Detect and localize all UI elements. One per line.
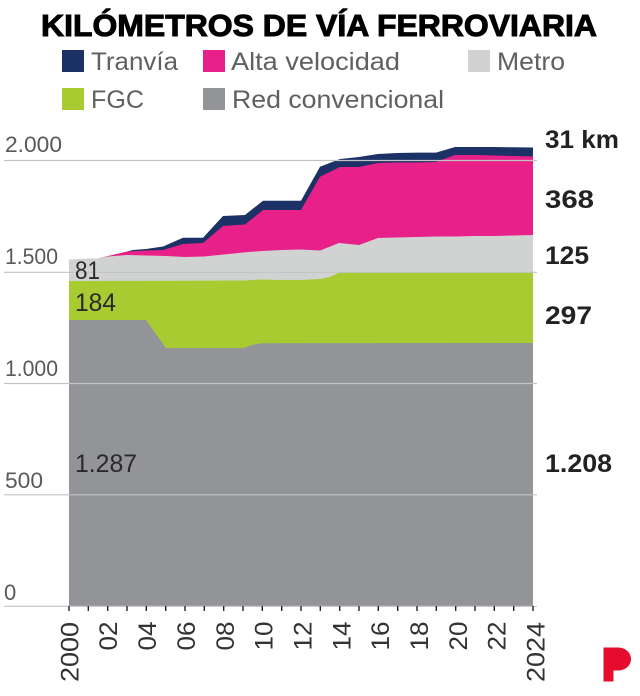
x axis labels: 2024 — [522, 622, 550, 682]
x axis labels: 14 — [328, 621, 356, 650]
legend: FGC — [62, 86, 144, 114]
y axis labels: 500 — [5, 468, 43, 493]
area: FGC — [69, 272, 533, 350]
x axis labels: 22 — [484, 622, 512, 650]
title: KILÓMETROS DE VÍA FERROVIARIA — [41, 7, 597, 43]
legend: Tranvía: Tranvía — [91, 48, 178, 76]
start values — [75, 257, 137, 478]
x axis labels: 06 — [173, 622, 201, 650]
start values: 81 — [75, 257, 100, 285]
x axis ticks — [69, 606, 533, 611]
y axis labels: 1.500 — [5, 244, 58, 269]
end values — [545, 126, 619, 478]
x axis labels: 20 — [445, 622, 473, 650]
stacked area chart — [69, 147, 533, 606]
end values: 125 — [545, 242, 589, 270]
start values: 1.287 — [75, 450, 137, 478]
x axis labels — [56, 621, 550, 682]
x axis labels: 2000 — [56, 622, 84, 682]
x axis labels: 16 — [367, 622, 395, 650]
area: tranvía — [127, 147, 533, 260]
legend: Red convencional: Red convencional — [232, 86, 444, 114]
legend: FGC: FGC — [91, 86, 144, 114]
icon: publisher logo — [604, 648, 631, 682]
start values: 184 — [75, 289, 116, 317]
x axis labels: 10 — [251, 622, 279, 650]
end values: 31 km — [545, 126, 619, 154]
x axis labels: 08 — [212, 622, 240, 650]
area: alta velocidad — [98, 155, 533, 270]
y axis labels — [4, 132, 62, 605]
end values: 1.208 — [545, 450, 612, 478]
end values: 368 — [545, 186, 594, 214]
grid lines — [4, 160, 537, 606]
legend: Metro — [468, 48, 565, 76]
area: red convencional — [69, 320, 533, 606]
end values: 297 — [545, 302, 592, 330]
x axis labels: 02 — [95, 622, 123, 650]
legend: Alta velocidad: Alta velocidad — [231, 48, 400, 76]
area: metro — [69, 235, 533, 290]
legend — [62, 48, 565, 114]
y axis labels: 0 — [4, 580, 16, 605]
x axis labels: 12 — [290, 622, 318, 650]
x axis labels: 18 — [406, 622, 434, 650]
y axis labels: 2.000 — [5, 132, 62, 157]
y axis labels: 1.000 — [5, 356, 58, 381]
legend: Metro: Metro — [497, 48, 565, 76]
x axis labels: 04 — [134, 621, 162, 650]
